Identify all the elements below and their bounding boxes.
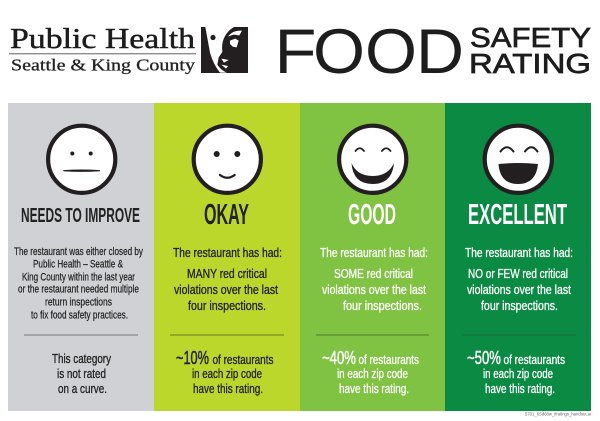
icon: slight smile face <box>194 126 261 193</box>
description text: The restaurant has had: <box>173 245 282 260</box>
statistic: about 50 percent: in each zip code <box>483 367 553 381</box>
heading: needs to improve: NEEDS TO IMPROVE <box>21 204 140 227</box>
description text: four inspections. <box>188 299 266 313</box>
heading: okay: OKAY <box>204 199 249 231</box>
description text <box>173 245 282 313</box>
description text <box>320 245 428 313</box>
description text: violations over the last <box>467 283 571 297</box>
statistic: about 10 percent: in each zip code <box>192 367 262 381</box>
statistic: about 40 percent: have this rating. <box>339 382 409 396</box>
logo wordmark <box>9 23 196 74</box>
description text: or the restaurant needed multiple <box>18 284 139 296</box>
title word: FOOD: D <box>416 17 464 87</box>
description text <box>14 246 143 321</box>
logo wordmark: Public Health <box>10 23 196 55</box>
description text: King County within the last year <box>22 271 135 283</box>
logo wordmark: Seattle & King County <box>11 56 196 74</box>
statistic: about 40 percent: ~40% <box>322 348 356 368</box>
title words: SAFETY RATING <box>469 22 591 79</box>
heading: good: GOOD <box>348 199 396 231</box>
icon: laughing face <box>485 126 552 193</box>
description text: The restaurant has had: <box>465 245 573 260</box>
note: not rated on a curve <box>52 352 112 396</box>
description text: Public Health – Seattle & <box>33 259 123 271</box>
icon: smiling face <box>339 126 406 193</box>
title word: FOOD: F <box>274 17 316 87</box>
description text: return inspections <box>45 296 112 308</box>
icon: neutral face <box>48 126 115 193</box>
statistic: about 40 percent <box>322 348 419 396</box>
description text: NO or FEW red critical <box>468 267 568 281</box>
panel: good <box>300 103 445 411</box>
description text: The restaurant was either closed by <box>14 246 143 258</box>
statistic: about 10 percent: have this rating. <box>193 382 263 396</box>
panel: excellent <box>445 103 591 411</box>
icon: portrait logo <box>201 27 248 73</box>
description text: to fix food safety practices. <box>31 309 128 321</box>
description text: violations over the last <box>174 283 278 297</box>
note: not rated on a curve: is not rated <box>57 367 106 381</box>
statistic: about 10 percent: ~10% <box>176 348 209 368</box>
title words: SAFETY RATING: SAFETY <box>470 22 591 53</box>
file name footnote: 5701_6Sd68w_ifratings_handout.ai <box>525 412 591 416</box>
statistic: about 50 percent <box>467 348 565 396</box>
statistic: about 50 percent: ~50% <box>467 348 501 368</box>
description text: violations over the last <box>322 283 426 297</box>
statistic: about 50 percent: of restaurants <box>504 353 565 367</box>
statistic: about 50 percent: have this rating. <box>485 382 555 396</box>
title: FOOD SAFETY RATING <box>274 17 591 87</box>
statistic: about 40 percent: in each zip code <box>337 367 408 381</box>
title word: FOOD: O <box>365 17 417 87</box>
statistic: about 10 percent: of restaurants <box>212 353 274 367</box>
description text: MANY red critical <box>187 267 267 281</box>
panel: okay <box>154 103 300 411</box>
note: not rated on a curve: This category <box>52 352 112 366</box>
title word: FOOD <box>274 17 464 87</box>
description text: four inspections. <box>343 299 422 313</box>
description text: The restaurant has had: <box>320 245 428 260</box>
description text <box>465 245 573 313</box>
title word: FOOD: O <box>313 17 365 87</box>
panel: needs to improve <box>8 103 154 411</box>
statistic: about 40 percent: of restaurants <box>358 353 419 367</box>
description text: SOME red critical <box>334 267 413 281</box>
logo: Public Health Seattle & King County <box>9 23 248 74</box>
note: not rated on a curve: on a curve. <box>58 382 107 396</box>
statistic: about 10 percent <box>176 348 274 396</box>
description text: four inspections. <box>481 299 558 313</box>
title words: SAFETY RATING: RATING <box>469 48 591 79</box>
